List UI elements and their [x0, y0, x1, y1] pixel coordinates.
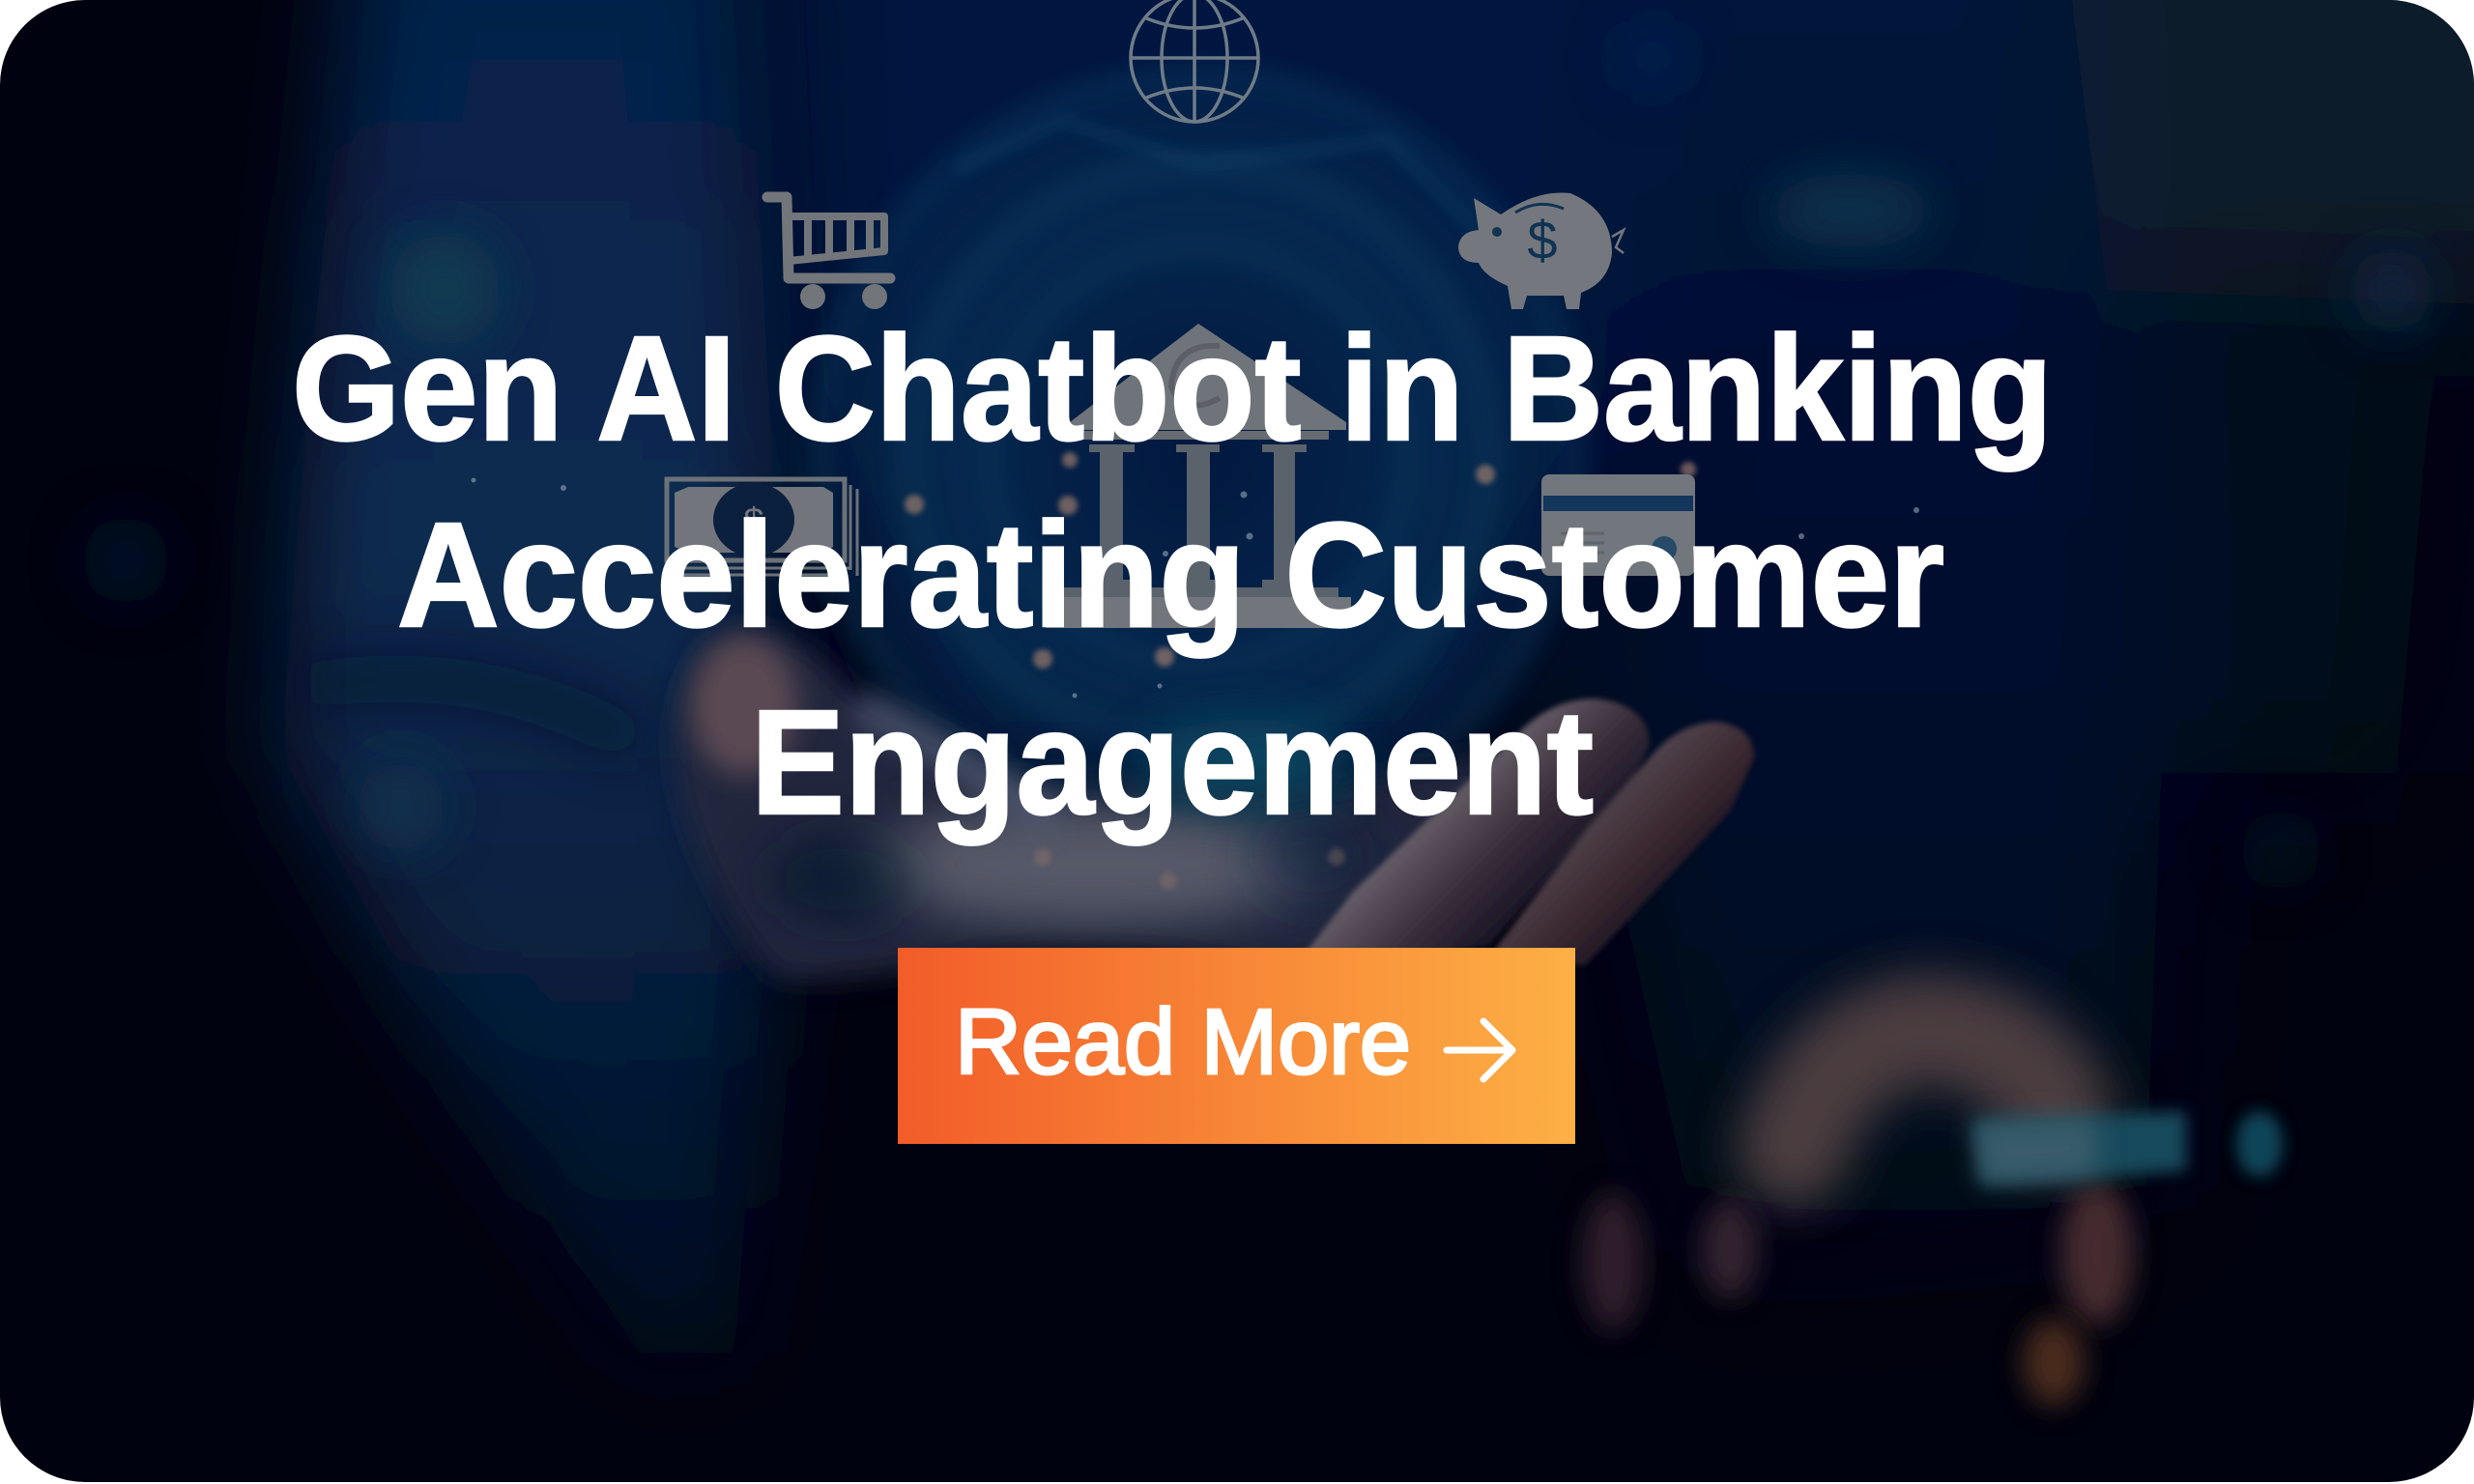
icon: banknotes: $: [743, 501, 764, 542]
glowing sphere: [825, 96, 1568, 801]
particles: [905, 452, 1696, 890]
second hand holding phone: [1582, 1029, 2283, 1406]
icon: arrow: [1447, 1021, 1512, 1079]
palm: [676, 628, 1754, 979]
icon: banknotes: [667, 479, 857, 576]
icon: bank building: [1046, 324, 1351, 628]
title: [292, 305, 2053, 845]
icon: globe: [1131, 0, 1258, 122]
jacket shading: [82, 19, 2432, 891]
button label: Read More: [955, 990, 1411, 1094]
title: Engagement: [751, 679, 1594, 845]
title: Gen AI Chatbot in Banking: [292, 305, 2053, 471]
read more button: [898, 948, 1575, 1144]
finger one: [1295, 699, 1650, 966]
finger two: [1493, 722, 1754, 966]
title: Accelerating Customer: [397, 492, 1944, 658]
icon: shopping cart: [767, 197, 890, 309]
icon: credit card: [1541, 474, 1695, 576]
icon: piggy bank: [1458, 192, 1624, 309]
icon: piggy bank: $: [1527, 210, 1558, 271]
